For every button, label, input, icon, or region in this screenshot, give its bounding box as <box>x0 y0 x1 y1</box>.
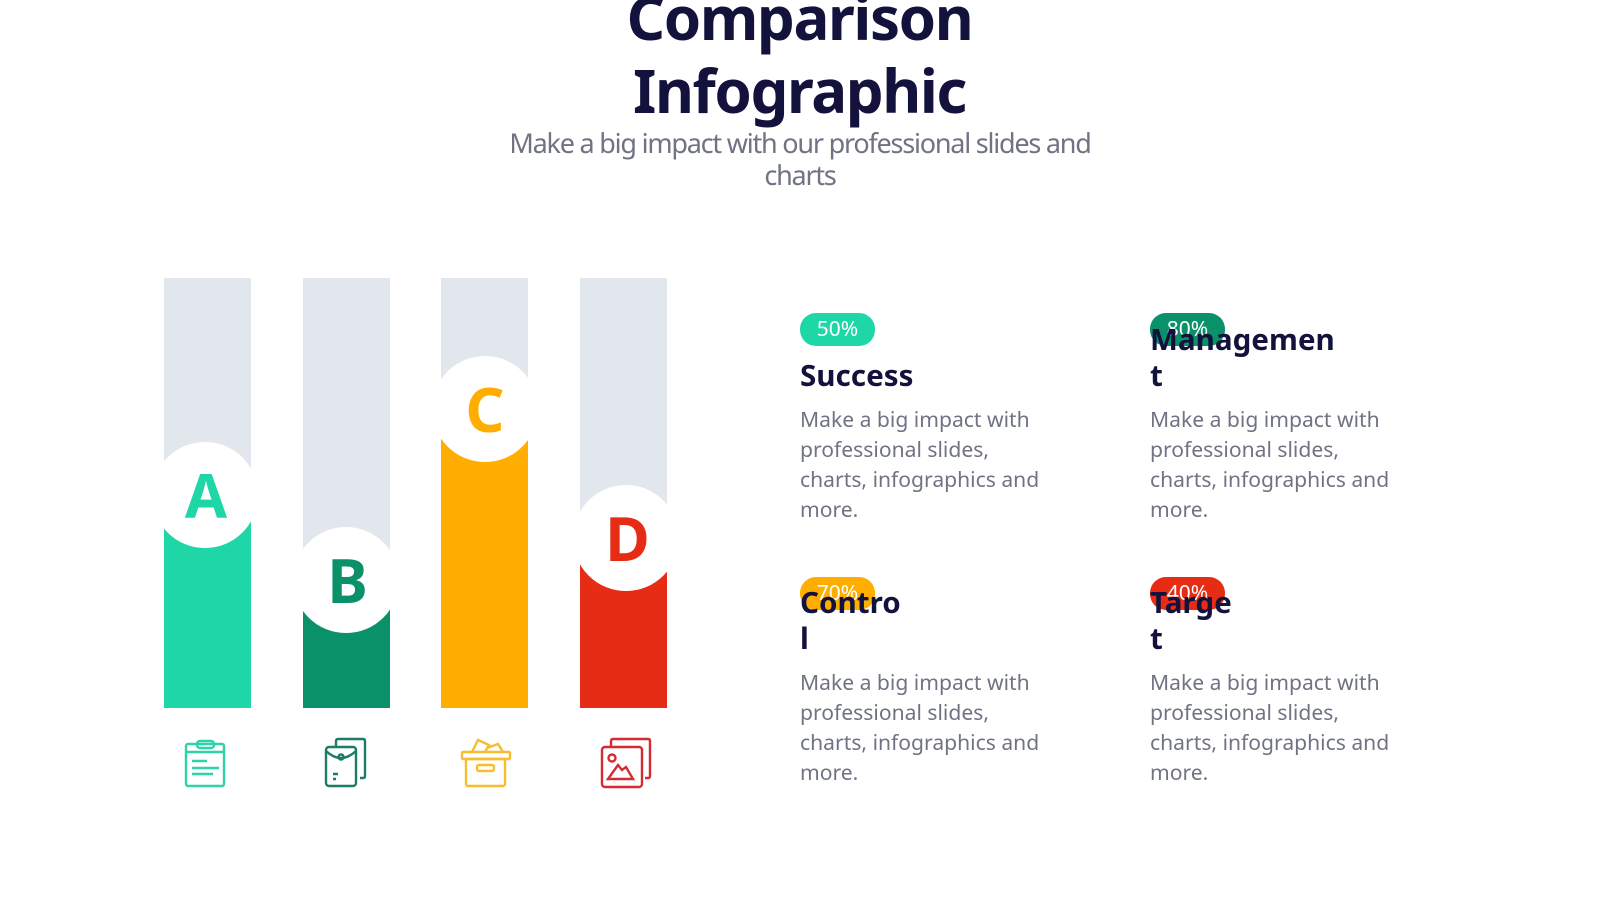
heading: Target <box>1150 581 1232 658</box>
body text: professional slides, <box>800 698 989 727</box>
bar B: B <box>327 538 368 621</box>
body text: more. <box>1150 758 1208 787</box>
body text: Make a big impact with <box>1150 405 1380 434</box>
heading: Management: Managemen <box>1150 318 1335 359</box>
body text: charts, infographics and <box>800 728 1039 757</box>
heading: Management <box>1150 318 1335 395</box>
badge: 70%: 70% <box>817 579 858 607</box>
icon: storage box <box>460 738 512 788</box>
bar B <box>303 278 390 708</box>
heading: Target: t <box>1150 617 1163 658</box>
body text: more. <box>800 495 858 524</box>
bar C: C <box>465 367 505 450</box>
bar A: A <box>185 453 227 536</box>
icon: clipboard <box>184 740 226 788</box>
body text: professional slides, <box>800 435 989 464</box>
bar D <box>580 278 667 708</box>
subtitle <box>509 124 1091 193</box>
heading: Management: t <box>1150 354 1163 395</box>
body text: Make a big impact with <box>1150 668 1380 697</box>
body text <box>800 668 1039 787</box>
body text: more. <box>800 758 858 787</box>
icon: image gallery <box>600 738 652 788</box>
heading: Target: Targe <box>1150 581 1232 622</box>
badge: 70% <box>800 577 875 610</box>
subtitle: Make a big impact with our professional slides and <box>509 124 1091 161</box>
subtitle: charts <box>764 156 836 193</box>
body text: charts, infographics and <box>1150 465 1389 494</box>
panel: management <box>1150 313 1389 524</box>
body text <box>800 405 1039 524</box>
bar C <box>441 278 528 708</box>
badge: 50% <box>800 313 875 346</box>
bar A <box>164 278 251 708</box>
heading: Control <box>800 581 901 658</box>
heading: Success: Success <box>800 354 913 395</box>
heading: Control: l <box>800 617 809 658</box>
badge: 40% <box>1150 577 1225 610</box>
badge: 80%: 80% <box>1167 315 1208 343</box>
body text <box>1150 405 1389 524</box>
icon: envelope documents <box>324 738 366 788</box>
body text: more. <box>1150 495 1208 524</box>
body text <box>1150 668 1389 787</box>
body text: Make a big impact with <box>800 405 1030 434</box>
title <box>627 0 972 131</box>
bar D: D <box>605 496 650 579</box>
badge: 80% <box>1150 313 1225 346</box>
body text: professional slides, <box>1150 698 1339 727</box>
panel: success <box>800 313 1039 524</box>
badge: 50%: 50% <box>817 315 858 343</box>
body text: professional slides, <box>1150 435 1339 464</box>
title: Infographic <box>633 49 966 131</box>
panel: target <box>1150 577 1389 787</box>
body text: charts, infographics and <box>800 465 1039 494</box>
body text: Make a big impact with <box>800 668 1030 697</box>
badge: 40%: 40% <box>1167 579 1208 607</box>
body text: charts, infographics and <box>1150 728 1389 757</box>
bar chart <box>164 278 667 708</box>
panel: control <box>800 577 1039 787</box>
heading: Control: Contro <box>800 581 901 622</box>
